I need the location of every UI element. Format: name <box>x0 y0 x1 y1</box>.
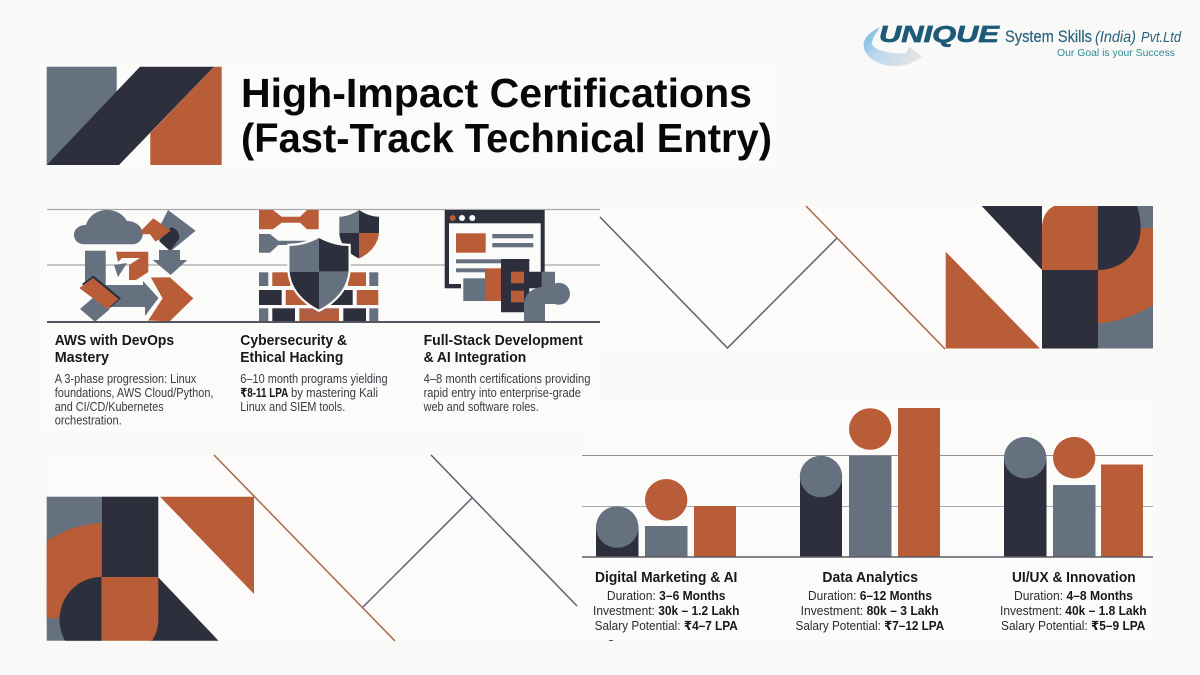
firewall bricks <box>259 272 378 322</box>
salary: Salary Potential: ₹5–9 LPA <box>1001 619 1145 633</box>
duration: Duration: 4–8 Months <box>1014 589 1133 603</box>
bars and circles <box>596 479 736 557</box>
geometric mosaic <box>47 497 158 641</box>
description: rapid entry into enterprise-grade <box>424 386 581 400</box>
description: web and software roles. <box>423 400 539 414</box>
grey connector <box>259 234 308 253</box>
geometric mosaic <box>1042 206 1153 348</box>
description: Linux and SIEM tools. <box>240 400 345 414</box>
dark triangle <box>982 206 1042 270</box>
orange diagonal line <box>806 206 945 349</box>
group label: Digital Marketing & AI <box>595 569 737 586</box>
dark triangle <box>150 577 218 641</box>
orange triangle <box>160 497 254 594</box>
cloud <box>74 210 143 244</box>
grey lines <box>363 455 577 607</box>
heading: AWS with DevOps <box>55 332 174 349</box>
panel: bottom left geometric decoration <box>47 455 582 641</box>
panel: comparison bar chart <box>582 400 1153 641</box>
lower diamond <box>80 296 110 322</box>
logo company name: System Skills <box>1005 27 1092 46</box>
orange triangle <box>946 252 1040 348</box>
grey zigzag line <box>600 217 837 348</box>
heading: Mastery <box>55 349 110 366</box>
logo wordmark: UNIQUE <box>879 21 1000 47</box>
logo swoosh <box>864 27 922 66</box>
heading: & AI Integration <box>424 349 526 366</box>
salary: Salary Potential: ₹4–7 LPA <box>595 619 738 633</box>
group label: Data Analytics <box>822 569 918 586</box>
logo Pvt Ltd label: Pvt.Ltd <box>1141 29 1182 46</box>
title: High-Impact Certifications <box>241 70 752 116</box>
center leaf <box>114 263 127 277</box>
orange chevron <box>147 277 194 322</box>
right arrow <box>100 281 158 316</box>
title: (Fast-Track Technical Entry) <box>241 115 772 161</box>
company logo <box>864 21 1182 66</box>
down arrow <box>153 250 187 275</box>
plug block <box>461 276 487 303</box>
icon: cybersecurity shields and firewall <box>259 210 379 322</box>
heading: Cybersecurity & <box>240 332 347 349</box>
browser window <box>445 210 545 288</box>
chart group: UI/UX and Innovation <box>1000 437 1147 633</box>
panel: technical certifications <box>40 204 602 432</box>
center arrow <box>116 252 148 280</box>
dark blob <box>159 227 179 251</box>
diamond <box>155 210 196 251</box>
small shield <box>339 210 379 258</box>
description: by mastering Kali <box>291 386 378 400</box>
description: 6–10 month programs yielding <box>240 372 388 386</box>
logo tagline: Our Goal is your Success <box>1057 47 1175 59</box>
left bar <box>85 251 106 291</box>
description: A 3-phase progression: Linux <box>55 372 197 386</box>
dark backing <box>82 276 121 308</box>
duration: Duration: 6–12 Months <box>808 589 932 603</box>
description: foundations, AWS Cloud/Python, <box>55 386 214 400</box>
heading: Ethical Hacking <box>240 349 343 366</box>
card: Cybersecurity and Ethical Hacking <box>240 332 388 414</box>
title block <box>40 62 776 170</box>
large shield <box>290 238 348 310</box>
investment: Investment: 30k – 1.2 Lakh <box>593 604 739 618</box>
group label: UI/UX & Innovation <box>1012 569 1136 586</box>
bars and circles <box>1004 437 1143 557</box>
investment: Investment: 40k – 1.8 Lakh <box>1000 604 1147 618</box>
salary: Salary Potential: ₹7–12 LPA <box>796 619 944 633</box>
panel: top right geometric decoration <box>600 206 1153 349</box>
heading: Full-Stack Development <box>424 332 583 349</box>
orange diagonal line <box>214 455 395 641</box>
logo India label: (India) <box>1095 29 1136 46</box>
description: and CI/CD/Kubernetes <box>55 400 164 414</box>
icon: AWS DevOps cloud and arrows <box>74 210 196 322</box>
description: ₹8-11 LPA <box>240 386 288 400</box>
orange block <box>79 278 118 309</box>
card: Full-Stack Development and AI Integration <box>423 332 591 414</box>
puzzle piece <box>524 272 570 322</box>
bars and circles <box>800 408 940 557</box>
description: orchestration. <box>55 414 122 428</box>
icon: title emblem <box>47 67 222 165</box>
card: AWS with DevOps Mastery <box>55 332 214 428</box>
duration: Duration: 3–6 Months <box>607 589 726 603</box>
orange connector <box>142 218 171 242</box>
description: 4–8 month certifications providing <box>424 372 591 386</box>
investment: Investment: 80k – 3 Lakh <box>801 604 939 618</box>
chart group: Digital Marketing and AI <box>593 479 739 633</box>
orange connector <box>259 210 319 229</box>
icon: full-stack browser window and puzzle <box>445 210 570 322</box>
chart group: Data Analytics <box>796 408 944 633</box>
dark E block <box>501 259 542 312</box>
